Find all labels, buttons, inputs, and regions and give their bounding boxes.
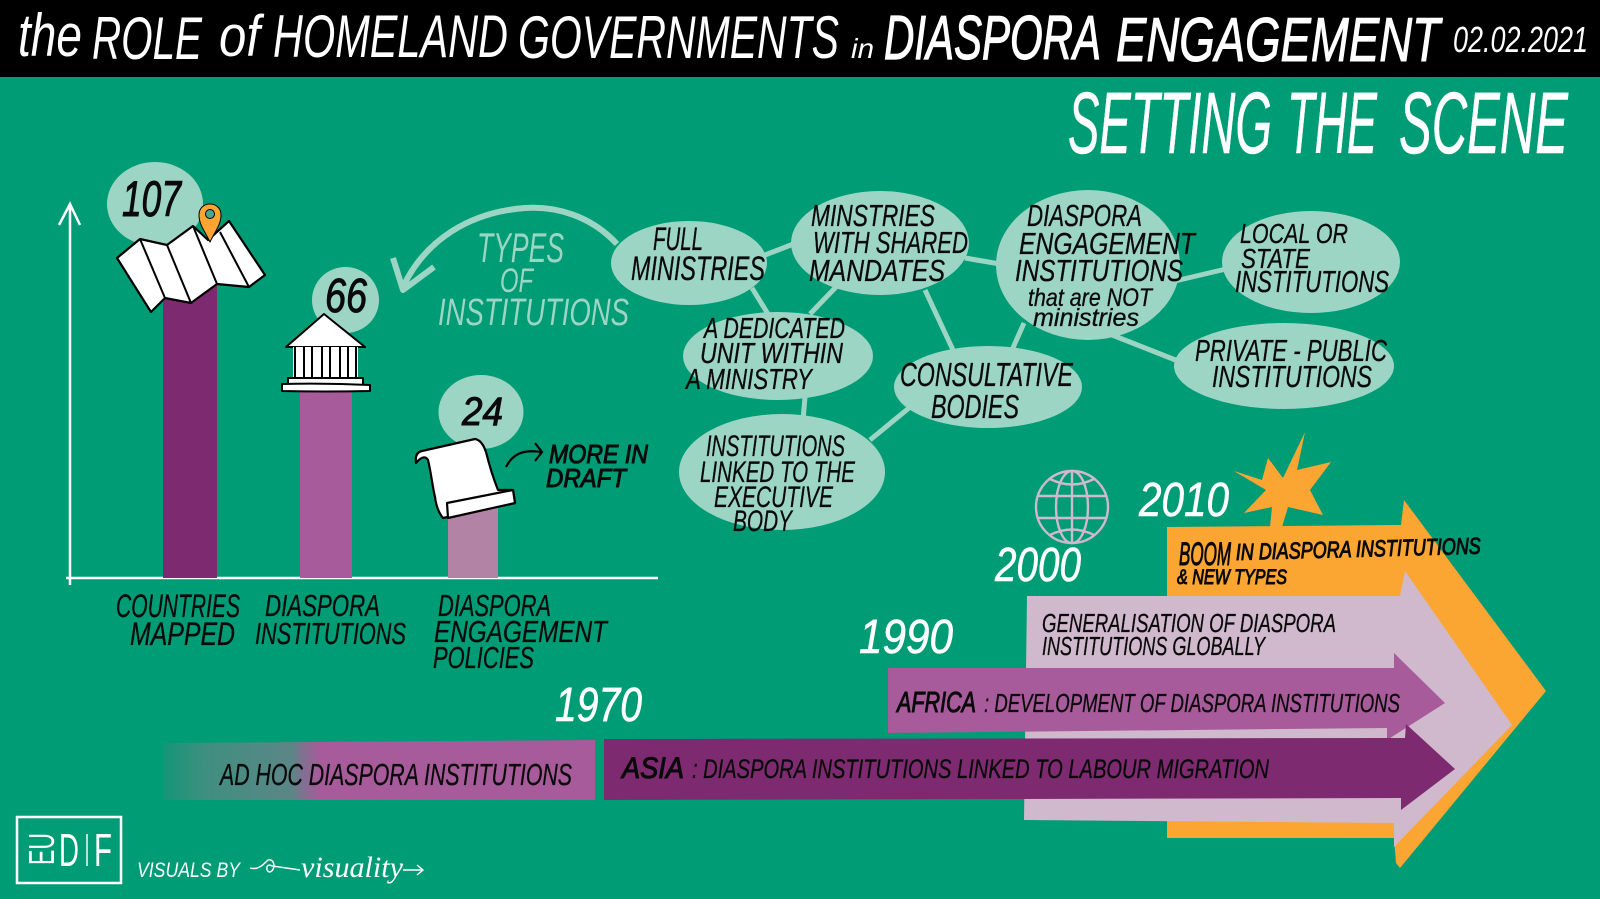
- label: diaspora engagement policies: [433, 588, 609, 675]
- bubble: 66: 66: [325, 270, 367, 323]
- node: dedicated unit: UNIT WITHIN: [700, 338, 843, 370]
- node: private-public institutions: PRIVATE - PUBLIC: [1195, 333, 1387, 368]
- arrow: boom 2010: BOOM: [1179, 536, 1231, 572]
- credit: visuals by visuality: VISUALS BY: [137, 859, 242, 882]
- label: types of institutions: INSTITUTIONS: [438, 292, 629, 334]
- note: more in draft: MORE IN: [549, 439, 648, 469]
- node: private-public institutions: INSTITUTIONS: [1212, 359, 1372, 394]
- icon: location pin: [199, 204, 221, 242]
- section heading: SETTING: [1068, 75, 1272, 172]
- icon: folded map: [117, 221, 265, 312]
- arrow: boom 2010: IN DIASPORA INSTITUTIONS: [1235, 533, 1482, 565]
- curved arrow: types of institutions: [393, 208, 617, 290]
- logo: EUDIF: [17, 817, 121, 883]
- title: in: [851, 33, 874, 64]
- label: types of institutions: TYPES: [477, 224, 564, 271]
- logo: EUDIF: EU: [21, 833, 62, 865]
- arrow: africa 1990: AFRICA: [896, 687, 976, 719]
- node: institutions linked to the executive body: LINKED TO THE: [700, 456, 856, 489]
- title: the: [18, 2, 82, 69]
- year: 1970: 1970: [555, 679, 642, 732]
- node: diaspora engagement institutions: ministries: [1033, 304, 1139, 332]
- icon: star burst: [1234, 432, 1331, 527]
- node: diaspora engagement institutions: INSTITUTIONS: [1015, 253, 1183, 288]
- network links: [752, 243, 1226, 440]
- arrow: boom 2010: & NEW TYPES: [1177, 566, 1287, 589]
- node: local or state institutions: INSTITUTIONS: [1235, 264, 1389, 299]
- icon: globe: [1036, 471, 1108, 543]
- node: consultative bodies: [894, 346, 1082, 428]
- label: types of institutions: OF: [500, 262, 535, 300]
- node: diaspora engagement institutions: that are NOT: [1028, 284, 1153, 312]
- bubble: 24: 24: [461, 390, 503, 434]
- note: more in draft: [546, 439, 648, 493]
- logo: EUDIF: D: [59, 824, 79, 876]
- arrow: generalisation 2000: [1024, 571, 1512, 847]
- bar chart: [59, 162, 658, 675]
- node: full ministries: [611, 221, 767, 305]
- year: 2010: 2010: [1138, 474, 1229, 527]
- node: full ministries: FULL: [653, 221, 703, 257]
- node: ministries with shared mandates: WITH SHARED: [813, 225, 968, 260]
- node: diaspora engagement institutions: DIASPORA: [1027, 198, 1142, 233]
- bubble: 66: [312, 267, 379, 333]
- year: 2000: 2000: [994, 539, 1081, 592]
- institution types network: [393, 190, 1400, 538]
- note: more in draft: DRAFT: [546, 463, 628, 493]
- label: countries mapped: [116, 588, 240, 652]
- logo: EUDIF: I: [85, 824, 89, 876]
- title: of: [219, 4, 265, 69]
- node: diaspora engagement institutions: ENGAGEMENT: [1019, 226, 1197, 261]
- title: [18, 2, 1443, 75]
- label: diaspora institutions: DIASPORA: [265, 588, 380, 623]
- logo: EUDIF: F: [94, 824, 112, 876]
- node: diaspora engagement institutions: [996, 190, 1197, 340]
- arrow: boom 2010: [1167, 500, 1546, 868]
- arrow: africa 1990: : DEVELOPMENT OF DIASPORA INSTITUTIONS: [984, 688, 1400, 718]
- year: 1990: 1990: [859, 611, 953, 664]
- node: ministries with shared mandates: [791, 191, 969, 295]
- title: GOVERNMENTS: [518, 4, 839, 71]
- node: local or state institutions: LOCAL OR: [1240, 218, 1348, 249]
- arrow: asia 1970: [604, 724, 1455, 810]
- label: diaspora engagement policies: POLICIES: [433, 640, 534, 675]
- title: ROLE: [92, 5, 203, 72]
- bubble: 107: [107, 162, 203, 246]
- label: types of institutions: [438, 224, 629, 334]
- bar: ad hoc diaspora institutions: AD HOC DIASPORA INSTITUTIONS: [219, 757, 572, 792]
- timeline: [163, 432, 1546, 868]
- label: diaspora engagement policies: ENGAGEMENT: [434, 614, 609, 649]
- bar: countries mapped: [163, 280, 217, 578]
- node: institutions linked to the executive body: INSTITUTIONS: [706, 430, 845, 463]
- label: diaspora institutions: [255, 588, 406, 651]
- node: consultative bodies: CONSULTATIVE: [900, 356, 1074, 393]
- label: countries mapped: COUNTRIES: [116, 588, 240, 624]
- bar: diaspora institutions: [300, 385, 352, 578]
- header band: [0, 0, 1600, 77]
- section heading: THE: [1287, 75, 1378, 172]
- node: full ministries: MINISTRIES: [631, 250, 765, 288]
- title: ENGAGEMENT: [1116, 6, 1443, 75]
- icon: paper scroll: [416, 439, 515, 518]
- arrow: generalisation 2000: INSTITUTIONS GLOBALLY: [1042, 631, 1266, 661]
- bubble: 107: 107: [122, 171, 183, 227]
- arrow: generalisation 2000: GENERALISATION OF DIASPORA: [1042, 608, 1336, 638]
- node: local or state institutions: STATE: [1241, 243, 1310, 274]
- label: diaspora institutions: INSTITUTIONS: [255, 616, 406, 651]
- arrow: asia 1970: ASIA: [620, 752, 684, 785]
- title: DIASPORA: [884, 4, 1101, 73]
- node: dedicated unit: A DEDICATED: [703, 313, 845, 345]
- node: dedicated unit: A MINISTRY: [684, 364, 814, 396]
- node: ministries with shared mandates: MINSTRIES: [811, 198, 935, 233]
- node: private-public institutions: [1174, 323, 1394, 409]
- bubble: 24: [438, 375, 524, 449]
- credit: visuals by visuality: visuality: [301, 851, 404, 884]
- label: countries mapped: MAPPED: [130, 616, 235, 652]
- node: ministries with shared mandates: MANDATES: [809, 253, 945, 288]
- icon: institution building: [282, 314, 370, 392]
- node: institutions linked to the executive body: [679, 414, 885, 538]
- arrow: asia 1970: : DIASPORA INSTITUTIONS LINKED TO LABOUR MIGRATION: [692, 754, 1269, 784]
- bar: ad hoc diaspora institutions: [163, 740, 595, 800]
- node: institutions linked to the executive body: EXECUTIVE: [714, 481, 834, 514]
- node: consultative bodies: BODIES: [931, 388, 1019, 425]
- arrow: more in draft: [506, 443, 542, 467]
- node: institutions linked to the executive body: BODY: [733, 505, 793, 538]
- title: HOMELAND: [273, 3, 508, 70]
- credit: visuals by visuality: [137, 851, 423, 884]
- label: diaspora engagement policies: DIASPORA: [438, 588, 551, 623]
- bar: policies: [448, 505, 498, 578]
- arrow: africa 1990: [888, 653, 1445, 740]
- chart axes: [59, 204, 658, 585]
- node: dedicated unit: [683, 312, 873, 400]
- node: local or state institutions: [1222, 211, 1400, 313]
